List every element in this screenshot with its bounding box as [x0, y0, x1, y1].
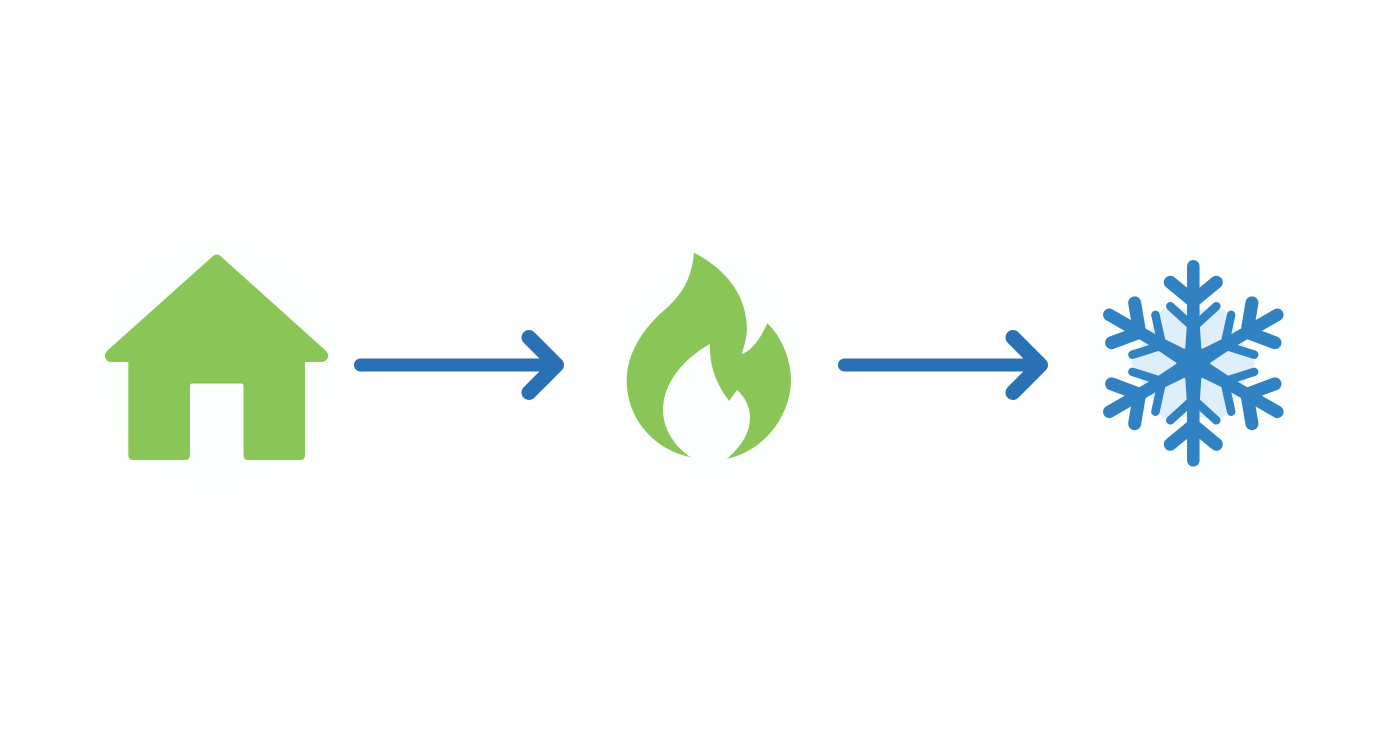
icon: house — [105, 254, 328, 460]
arrow: house to flame — [360, 338, 556, 392]
snowflake arms — [1098, 266, 1289, 460]
icon: snowflake — [1098, 266, 1289, 460]
arrow: flame to snowflake — [844, 338, 1040, 392]
snowflake pale centre — [1131, 309, 1255, 417]
icon: flame — [627, 253, 791, 459]
